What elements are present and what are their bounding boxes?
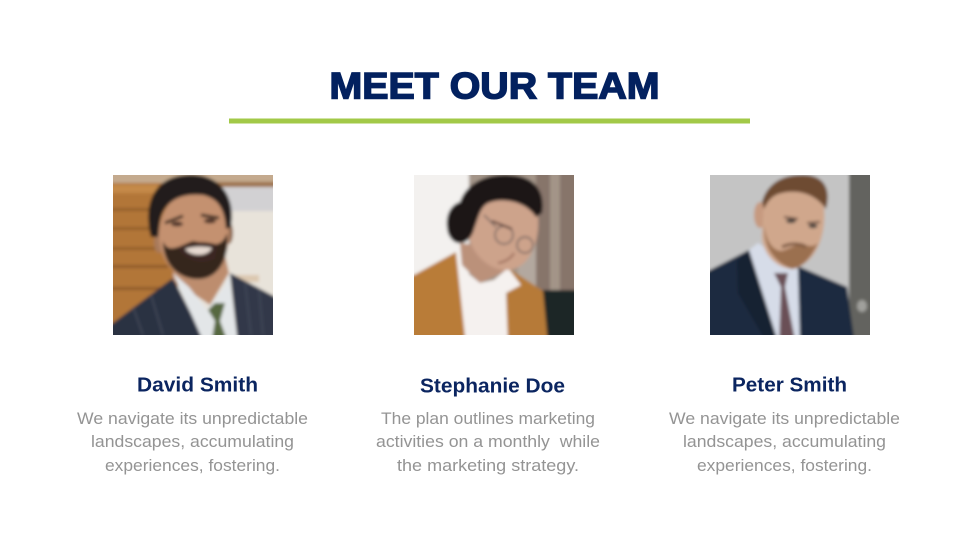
neck — [173, 255, 229, 305]
hair — [148, 175, 232, 237]
name: Stephanie Doe: Stephanie Doe — [420, 376, 565, 398]
description: Peter Smith: We navigate its unpredictable — [669, 409, 900, 428]
beard — [764, 225, 818, 269]
suit — [113, 277, 203, 335]
photo: David Smith — [113, 175, 273, 335]
description: Stephanie Doe: activities on a monthly while — [376, 432, 600, 451]
title underline — [229, 118, 750, 124]
description: Peter Smith: landscapes, accumulating — [683, 432, 886, 451]
glasses — [484, 215, 533, 253]
description: Peter Smith — [669, 409, 900, 475]
shirt — [467, 268, 524, 335]
description: David Smith: landscapes, accumulating — [91, 432, 294, 451]
eyes — [784, 217, 798, 219]
name: David Smith: David Smith — [137, 374, 258, 396]
hair — [447, 175, 543, 243]
description: David Smith: experiences, fostering. — [105, 456, 280, 475]
jacket — [414, 251, 467, 335]
beard — [163, 233, 227, 279]
description: Peter Smith: experiences, fostering. — [697, 456, 872, 475]
description: David Smith: We navigate its unpredictable — [77, 409, 308, 428]
face — [159, 191, 229, 279]
eyes — [165, 216, 183, 223]
photo: Stephanie Doe — [414, 175, 574, 335]
shirt — [173, 273, 238, 345]
team member: Stephanie Doe — [376, 165, 600, 475]
ear — [754, 202, 766, 228]
description: Stephanie Doe: the marketing strategy. — [397, 456, 579, 475]
description: David Smith — [77, 409, 308, 475]
team member: Peter Smith — [669, 165, 900, 475]
face — [762, 192, 824, 269]
description: Stephanie Doe: The plan outlines marketing — [381, 409, 595, 428]
description: Stephanie Doe — [376, 409, 600, 475]
neck — [460, 243, 510, 283]
ears — [152, 234, 162, 254]
shirt — [749, 243, 800, 345]
name: Peter Smith: Peter Smith — [732, 374, 847, 396]
tie — [774, 273, 796, 345]
photo: Peter Smith — [710, 175, 870, 335]
dark sofa — [541, 288, 574, 335]
suit — [710, 250, 855, 335]
tie — [206, 301, 228, 335]
title: MEET OUR TEAM — [330, 64, 660, 106]
face — [468, 200, 538, 270]
team member: David Smith — [77, 165, 308, 475]
stripes — [132, 296, 164, 334]
hair — [762, 175, 828, 209]
